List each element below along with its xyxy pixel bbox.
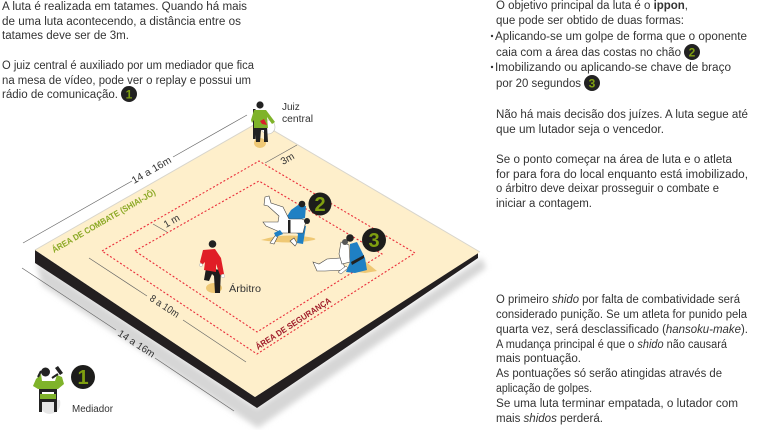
text block: imobilização: iniciar a contagem.	[496, 198, 592, 210]
mat shadow	[36, 258, 486, 428]
text block: shido: A mudança principal é que o shido não causará	[496, 339, 728, 351]
text block: ippon: por 20 segundos	[496, 78, 581, 90]
label: área de segurança: ÁREA DE SEGURANÇA	[254, 295, 333, 352]
text block: juiz central e mediador	[2, 60, 255, 102]
badge 3	[362, 228, 386, 252]
text block: ippon: 3	[589, 76, 596, 90]
figure: mediador	[33, 366, 64, 414]
dimension: 3m: 3m	[279, 151, 297, 168]
text block: ippon: Imobilizando ou aplicando-se chave de braço	[495, 62, 731, 74]
label: mediador: Mediador	[72, 404, 114, 415]
figure: juiz central	[251, 101, 275, 148]
text block: ippon: Aplicando-se um golpe de forma que o oponente	[495, 31, 747, 43]
text block: decisão: que um lutador seja o vencedor.	[496, 124, 664, 136]
text block: juiz central e mediador: O juiz central é auxiliado por um mediador que fica	[2, 60, 255, 72]
dimension: 1 m	[153, 213, 182, 232]
dimension: 8 a 10m: 8 a 10m	[147, 293, 181, 320]
dimension: 14 a 16m top: 14 a 16m	[130, 155, 174, 187]
text block: shido: considerado punição. Se um atleta for punido pela	[496, 309, 748, 321]
figure: imobilização	[313, 234, 377, 274]
text block: juiz central e mediador: rádio de comunicação.	[2, 89, 118, 101]
dimension: 3m	[265, 145, 297, 168]
text block: tatames: A luta é realizada em tatames. Quando há mais	[2, 1, 247, 13]
text block: ippon: caia com a área das costas no chão	[496, 47, 681, 59]
dimension: 14 a 16m top	[23, 115, 247, 243]
text block: shido: mais shidos perderá.	[496, 413, 603, 425]
dimension: 14 a 16m bottom: 14 a 16m	[115, 328, 157, 360]
badge 3: 3	[368, 230, 380, 252]
text block: ippon: O objetivo principal da luta é o ippon,	[496, 0, 688, 12]
label: juiz central: central	[282, 114, 313, 125]
badge 1	[71, 365, 95, 389]
text block: imobilização: o árbitro deve deixar prosseguir o combate e	[496, 183, 719, 195]
badge 2	[308, 192, 332, 216]
dimension: 8 a 10m	[89, 258, 246, 362]
dimension: 1 m: 1 m	[162, 213, 182, 231]
text block: shido: As pontuações só serão atingidas através de	[496, 368, 722, 380]
text block: ippon	[491, 0, 747, 91]
figure: golpe, área das costas no chão	[261, 196, 315, 246]
mat: tatame	[35, 122, 480, 408]
text block: juiz central e mediador: na mesa de vídeo, pode ver o replay e possui um	[2, 75, 251, 87]
text block: imobilização	[496, 154, 748, 210]
text block: imobilização: Se o ponto começar na área de luta e o atleta	[496, 154, 733, 166]
badge 2: 2	[314, 194, 326, 216]
text block: ippon: que pode ser obtido de duas formas:	[496, 15, 684, 27]
text block: juiz central e mediador: 1	[126, 88, 133, 102]
combat area inner red dashed line	[135, 181, 382, 332]
text block: shido: quarta vez, será desclassificado (hansoku-make).	[496, 324, 748, 336]
label: juiz central: Juiz	[282, 102, 300, 113]
text block: imobilização: for para fora do local enquanto está imobilizado,	[496, 169, 748, 181]
text block: shido	[496, 294, 748, 425]
dimension: 14 a 16m bottom	[22, 268, 234, 411]
figure: árbitro	[199, 240, 225, 293]
text block: shido: O primeiro shido por falta de combatividade será	[496, 294, 741, 306]
text block: shido: Se uma luta terminar empatada, o lutador com	[496, 398, 738, 410]
text block: shido: aplicação de golpes.	[496, 383, 592, 395]
text block: tatames: de uma luta acontecendo, a distância entre os	[2, 16, 241, 28]
label: juiz central	[282, 102, 313, 125]
text block: decisão	[496, 109, 748, 136]
label: árbitro: Árbitro	[229, 282, 261, 295]
label: área de combate: ÁREA DE COMBATE (SHIAI-JÔ)	[50, 186, 157, 255]
combat area outer red dashed line	[102, 161, 415, 354]
text block: shido: mais pontuação.	[496, 353, 581, 365]
text block: decisão: Não há mais decisão dos juízes. A luta segue até	[496, 109, 748, 121]
badge 1: 1	[77, 367, 89, 389]
text block: ippon: 2	[689, 46, 696, 60]
text block: tatames: tatames deve ser de 3m.	[2, 30, 129, 42]
text block: tatames	[2, 1, 247, 42]
